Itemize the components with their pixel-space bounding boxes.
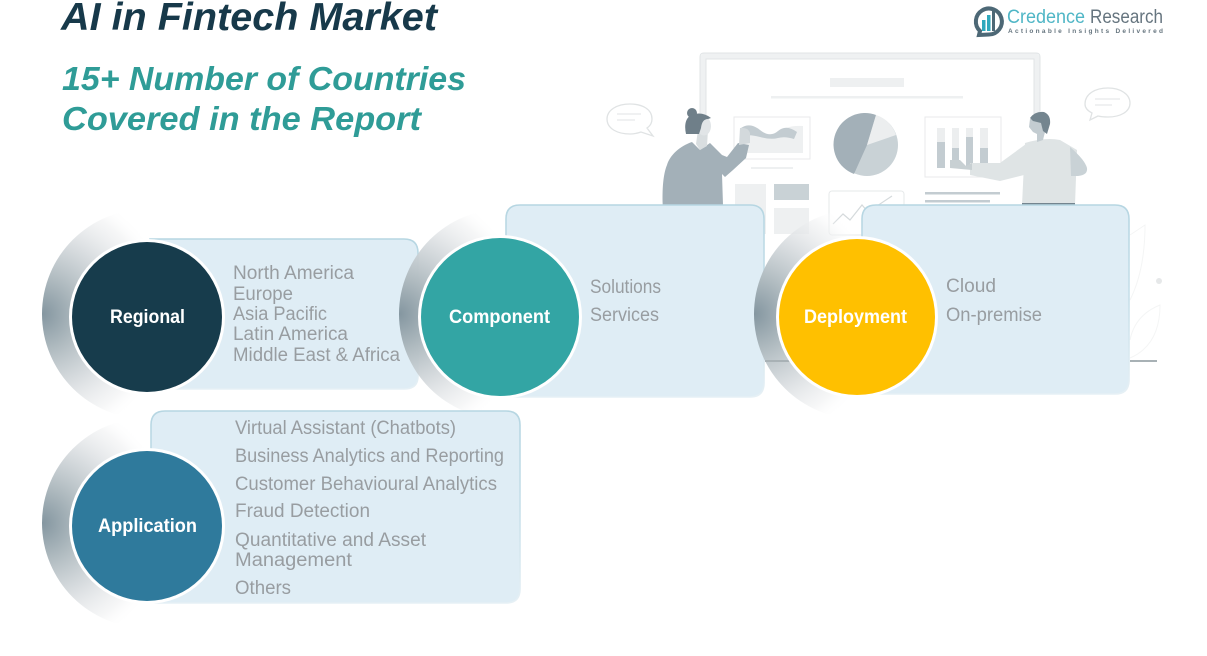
pie chart [834, 113, 898, 176]
card [151, 411, 520, 603]
panel: deployment [754, 205, 1129, 419]
monitor lower blocks [735, 167, 1000, 235]
list: Cloud [946, 276, 996, 297]
circle: Application [69, 448, 225, 604]
logo: Credence Research: Actionable Insights Delivered [1008, 28, 1163, 35]
monitor title bar [830, 78, 904, 87]
panel: component [399, 205, 764, 419]
logo: Credence Research [976, 7, 1163, 35]
list: North America [233, 263, 354, 284]
list: Europe [233, 284, 293, 305]
subtitle: Covered in the Report [62, 100, 423, 137]
circle: Component [418, 235, 582, 399]
card [862, 205, 1129, 394]
area chart [734, 117, 810, 159]
crescent [754, 209, 964, 419]
crescent [42, 418, 252, 628]
bar chart [925, 117, 1001, 177]
list [233, 263, 400, 366]
list: Business Analytics and Reporting [235, 446, 504, 467]
list: Virtual Assistant (Chatbots) [235, 418, 456, 439]
panel: application [42, 411, 520, 628]
list: Customer Behavioural Analytics [235, 474, 497, 495]
illustration: presenters at dashboard [607, 53, 1162, 362]
list: Management [235, 550, 353, 571]
subtitle [62, 60, 466, 137]
crescent [42, 209, 252, 419]
list: Services [590, 305, 659, 326]
circle: Regional [69, 239, 225, 395]
list: Solutions [590, 277, 661, 298]
panel: regional [42, 209, 418, 419]
card [506, 205, 764, 397]
ground line [765, 360, 791, 362]
list: On-premise [946, 305, 1042, 326]
list: Fraud Detection [235, 501, 370, 522]
list: Asia Pacific [233, 304, 327, 325]
logo: Credence Research: Research [1090, 7, 1163, 28]
list: Quantitative and Asset [235, 530, 427, 551]
figure: man [950, 112, 1087, 205]
speech bubble left [607, 104, 653, 136]
list: Latin America [233, 324, 348, 345]
list [235, 418, 504, 599]
circle: Deployment: Deployment [804, 307, 908, 328]
circle: Regional: Regional [110, 307, 185, 328]
crescent [399, 209, 609, 419]
logo: Credence Research: Credence [1007, 7, 1085, 28]
card [150, 239, 418, 389]
figure: woman [663, 108, 750, 205]
monitor frame [700, 53, 1040, 128]
circle: Application: Application [98, 516, 197, 537]
list: Middle East & Africa [233, 345, 400, 366]
icon: logo mark [976, 9, 1002, 35]
circle: Component: Component [449, 307, 551, 328]
list [590, 277, 661, 326]
subtitle: 15+ Number of Countries [62, 60, 466, 97]
ground line and plant [1130, 225, 1162, 362]
speech bubble right [1085, 88, 1130, 120]
list: Others [235, 578, 291, 599]
list [946, 276, 1042, 326]
circle: Deployment [776, 236, 938, 398]
